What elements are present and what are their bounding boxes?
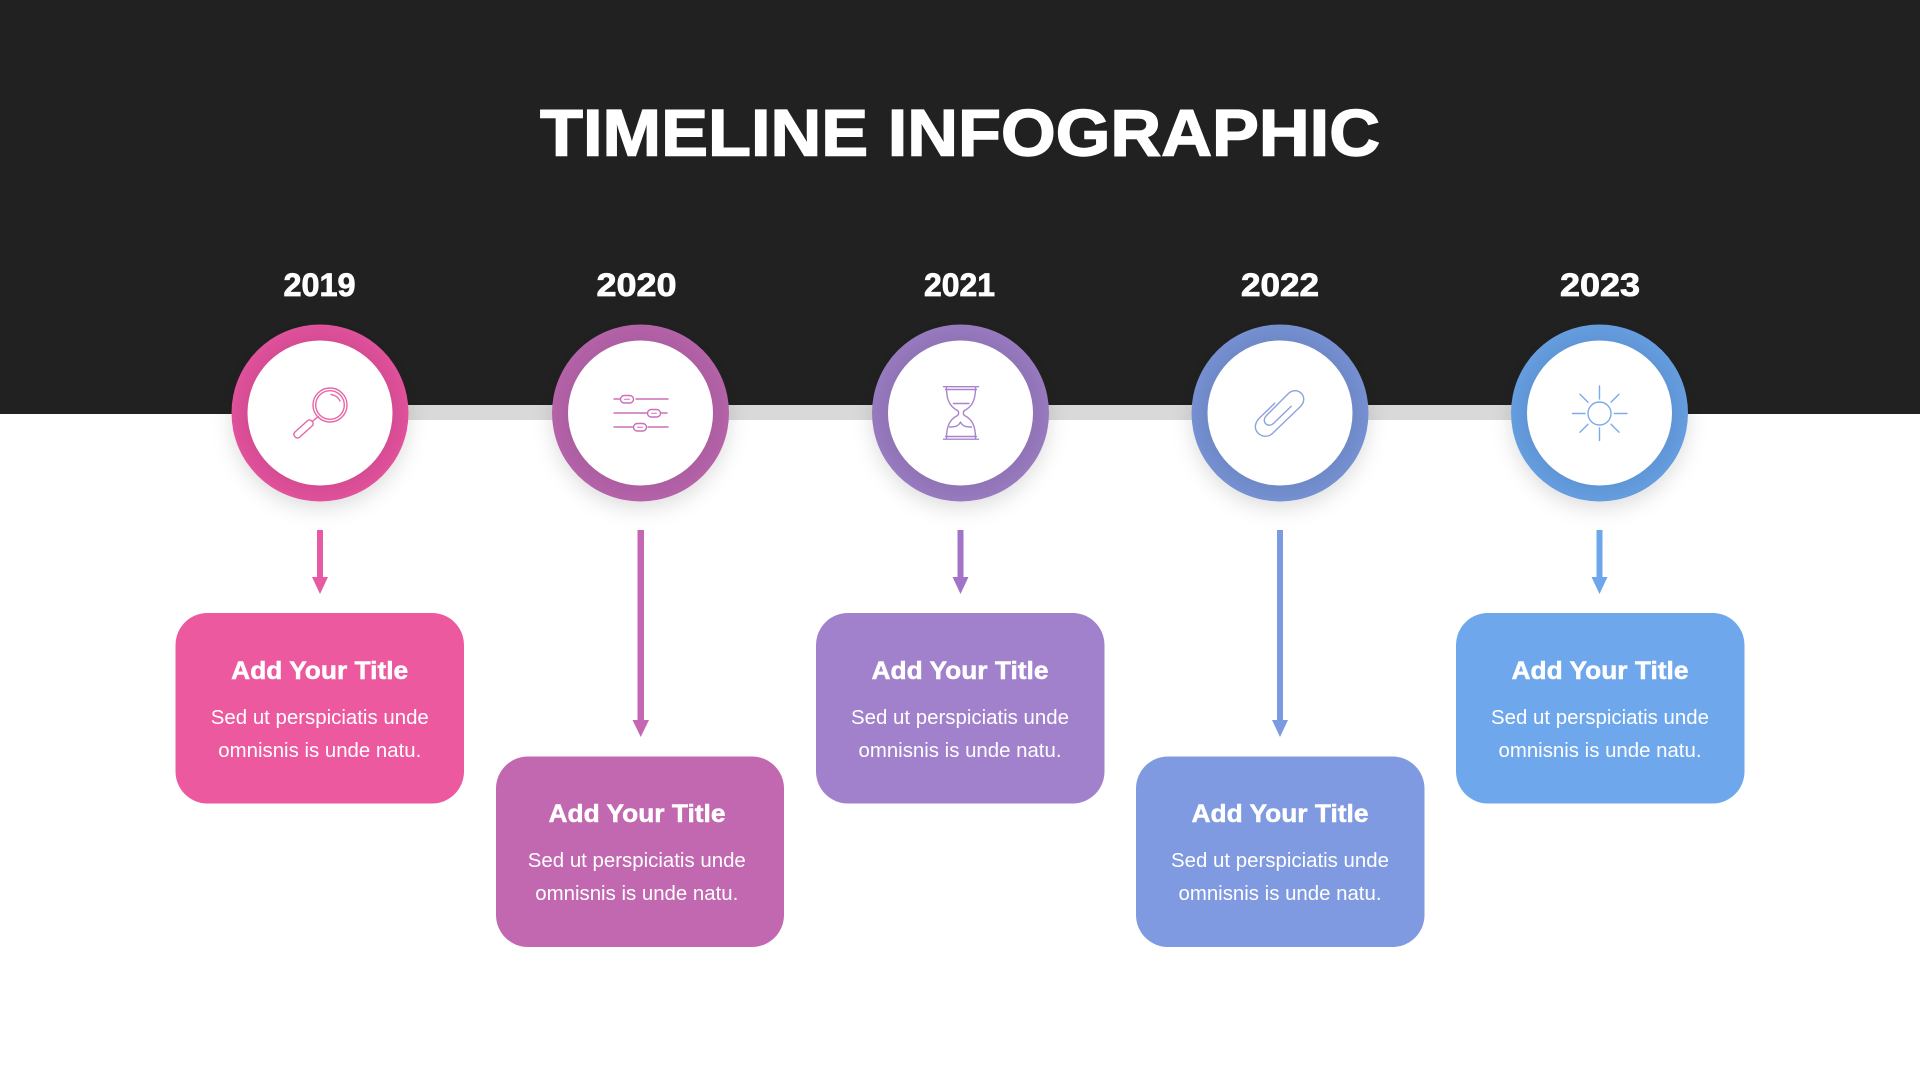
milestone 2023 <box>1456 267 1744 804</box>
card title 2023: Add Your Title <box>1512 657 1689 685</box>
year 2019: 2019 <box>284 267 356 303</box>
milestone 2022 <box>1136 267 1424 947</box>
milestone 2021 <box>816 267 1104 804</box>
card text 2022 <box>1171 850 1389 905</box>
year 2023: 2023 <box>1560 267 1640 303</box>
card 2023 <box>1456 613 1744 804</box>
dark header band <box>0 0 1920 414</box>
card 2021 <box>816 613 1104 804</box>
year 2020: 2020 <box>596 267 676 303</box>
year 2021: 2021 <box>924 267 995 303</box>
card title 2019: Add Your Title <box>231 657 408 685</box>
milestone 2020 <box>496 267 784 947</box>
card title 2022: Add Your Title <box>1192 800 1369 828</box>
card title 2020: Add Your Title <box>548 800 726 828</box>
card text 2019: omnisnis is unde natu. <box>218 740 421 762</box>
card text 2023: Sed ut perspiciatis unde <box>1491 707 1709 729</box>
arrow 2021 <box>952 530 968 594</box>
card text 2021: Sed ut perspiciatis unde <box>851 707 1069 729</box>
arrow 2020 <box>632 530 649 737</box>
icon: paperclip <box>1255 391 1304 436</box>
card text 2020: omnisnis is unde natu. <box>535 883 738 905</box>
card text 2019 <box>211 707 429 762</box>
icon: hourglass <box>944 387 978 439</box>
ring node 2023 <box>1511 324 1688 502</box>
card text 2021 <box>851 707 1069 762</box>
card text 2020 <box>528 850 746 905</box>
ring node 2022 <box>1192 324 1368 502</box>
card text 2020: Sed ut perspiciatis unde <box>528 850 746 872</box>
card text 2021: omnisnis is unde natu. <box>858 740 1062 762</box>
ring node 2020 <box>552 324 729 502</box>
card text 2019: Sed ut perspiciatis unde <box>211 707 429 729</box>
card title 2021: Add Your Title <box>872 657 1049 685</box>
card 2020 <box>496 756 784 947</box>
ring node 2019 <box>232 324 408 502</box>
card 2019 <box>176 613 464 804</box>
card text 2022: omnisnis is unde natu. <box>1178 883 1382 905</box>
card text 2022: Sed ut perspiciatis unde <box>1171 850 1389 872</box>
arrow 2019 <box>312 530 328 594</box>
title: TIMELINE INFOGRAPHIC <box>540 96 1380 170</box>
ring node 2021 <box>872 324 1049 502</box>
arrow 2023 <box>1592 530 1608 594</box>
arrow 2022 <box>1272 530 1288 737</box>
year 2022: 2022 <box>1241 267 1319 303</box>
icon: sliders <box>614 396 668 431</box>
card text 2023: omnisnis is unde natu. <box>1498 740 1702 762</box>
icon: sun <box>1572 386 1627 440</box>
milestone 2019 <box>176 267 464 804</box>
card text 2023 <box>1491 707 1709 762</box>
timeline connector bar <box>320 405 1600 420</box>
icon: magnifying glass <box>293 388 347 439</box>
card 2022 <box>1136 756 1424 947</box>
